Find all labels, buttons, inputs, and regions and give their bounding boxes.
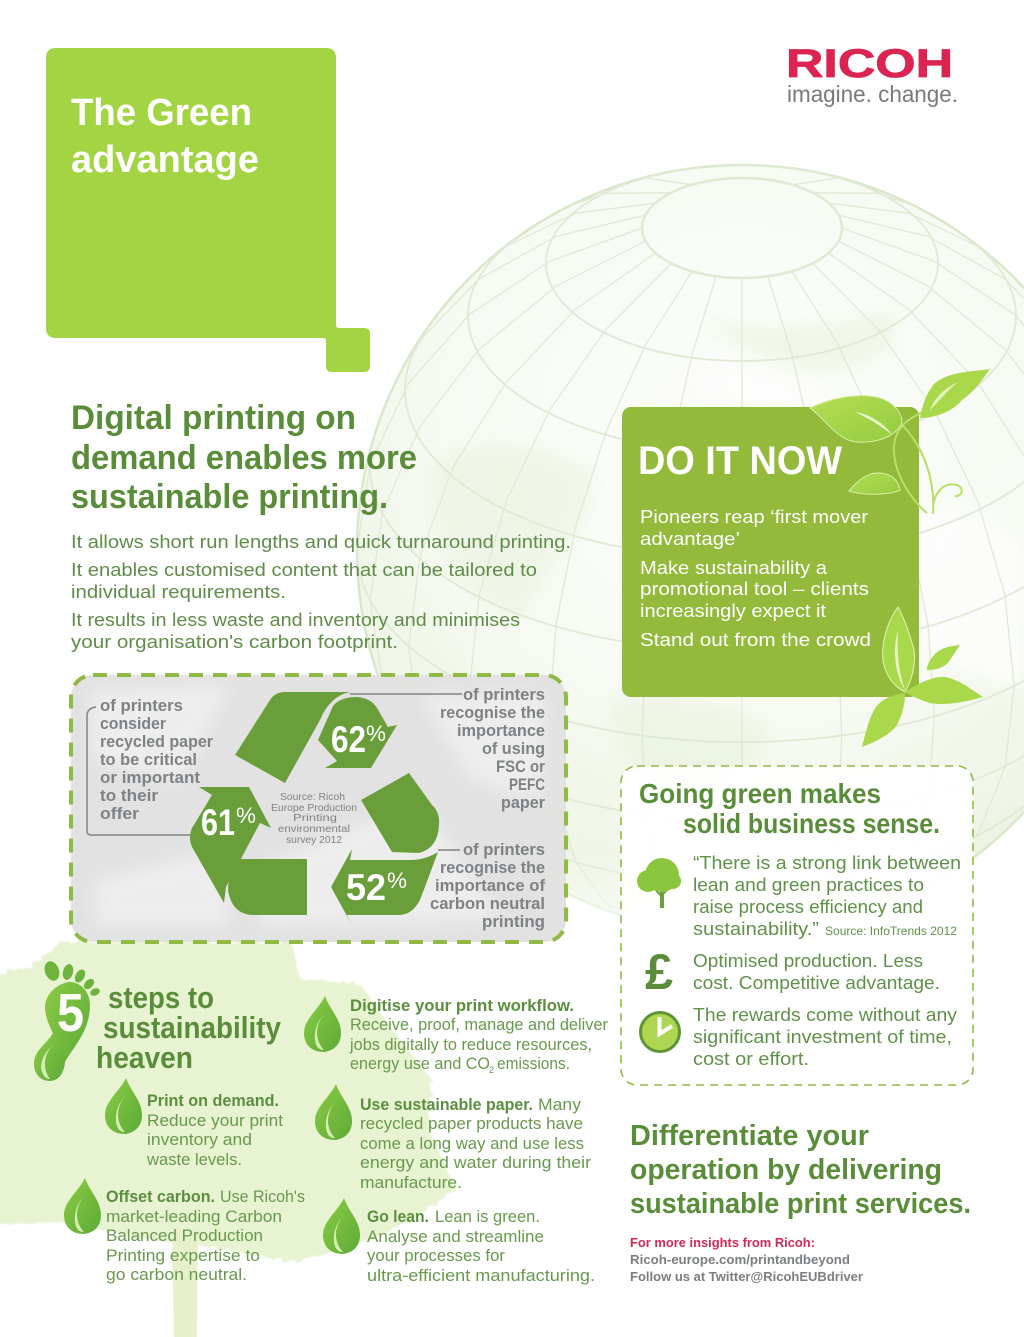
percentages: %	[236, 803, 256, 828]
heading: do it now: DO IT NOW	[638, 439, 842, 483]
stat text: 62 percent: recognise the	[440, 703, 545, 722]
intro text: your organisation's carbon footprint.	[71, 632, 398, 652]
percentages: %	[366, 721, 386, 746]
heading: differentiate: Differentiate your	[630, 1120, 869, 1152]
stat text: 52 percent: printing	[482, 912, 545, 931]
step: go lean: Go lean.	[367, 1208, 429, 1226]
stat text: 62 percent: PEFC	[509, 775, 545, 794]
intro text: It allows short run lengths and quick turnaround printing.	[71, 532, 571, 552]
footer links: For more insights from Ricoh:	[630, 1236, 815, 1250]
heading: going green: Going green makes	[639, 778, 881, 809]
quote text: “There is a strong link between	[693, 852, 961, 873]
step: digitise workflow	[304, 996, 608, 1075]
step: sustainable paper: manufacture.	[360, 1174, 462, 1192]
heading: differentiate: sustainable print services.	[630, 1188, 971, 1220]
icon: footprint with number five	[34, 959, 101, 1081]
quote text: raise process efficiency and	[693, 896, 923, 917]
cost text	[693, 950, 940, 993]
step: print on demand: inventory and	[147, 1131, 252, 1149]
leader lines	[87, 694, 462, 850]
step: print on demand: Print on demand.	[147, 1092, 279, 1110]
intro text: It results in less waste and inventory and minimises	[71, 610, 520, 630]
step: offset carbon: market-leading Carbon	[106, 1208, 282, 1226]
stat text: 61 percent: or important	[100, 768, 200, 787]
step: offset carbon: Use Ricoh's	[220, 1188, 305, 1206]
logo: Ricoh: imagine. change.	[787, 81, 958, 107]
stat text: 62 percent: importance	[457, 721, 545, 740]
stat text: 52 percent: importance of	[435, 876, 545, 895]
step: digitise workflow: 2	[489, 1065, 494, 1075]
heading: going green: solid business sense.	[683, 808, 940, 839]
logo: Ricoh: RICOH	[786, 42, 953, 86]
step: digitise workflow: jobs digitally to reduce resources,	[349, 1036, 592, 1054]
footer links	[630, 1236, 863, 1284]
heading: digital printing	[71, 399, 417, 516]
heading: digital printing: Digital printing on	[71, 399, 356, 437]
title: advantage	[71, 139, 259, 181]
step: sustainable paper: recycled paper products have	[360, 1115, 583, 1133]
stat text: 62 percent: of using	[482, 739, 545, 758]
percentages: 52	[346, 867, 386, 908]
stat text: 61 percent	[100, 696, 213, 823]
icon: pound: £	[645, 944, 673, 1000]
panel: do it now	[622, 369, 990, 747]
source note: survey 2012	[286, 834, 342, 846]
footer links: Ricoh-europe.com/printandbeyond	[630, 1253, 850, 1267]
icon: footprint with number five: 5	[57, 983, 84, 1043]
do it now text: promotional tool – clients	[640, 578, 869, 599]
intro text: individual requirements.	[71, 582, 286, 602]
percentages: 62	[331, 719, 366, 760]
stat text: 61 percent: of printers	[100, 696, 183, 715]
do it now text	[640, 506, 871, 650]
footer links: Follow us at Twitter@RicohEUBdriver	[630, 1270, 863, 1284]
rewards text: The rewards come without any	[693, 1004, 958, 1025]
step: sustainable paper: Many	[538, 1096, 582, 1114]
panel: recycling statistics	[71, 675, 566, 942]
stat text: 61 percent: recycled paper	[100, 732, 213, 751]
quote text: lean and green practices to	[693, 874, 924, 895]
rewards text: cost or effort.	[693, 1048, 809, 1069]
heading: 5 steps: steps to	[108, 980, 214, 1015]
stat text: 62 percent: paper	[501, 793, 545, 812]
cost text: Optimised production. Less	[693, 950, 923, 971]
step: offset carbon: Printing expertise to	[106, 1247, 260, 1265]
intro text: It enables customised content that can be tailored to	[71, 560, 537, 580]
percentages: 61	[201, 802, 235, 843]
do it now text: Pioneers reap ‘first mover	[640, 506, 868, 527]
step: sustainable paper	[315, 1084, 592, 1192]
do it now text: advantage’	[640, 528, 740, 549]
stat text: 62 percent	[440, 685, 545, 812]
stat text: 61 percent: offer	[100, 804, 139, 823]
heading: going green	[639, 778, 940, 839]
icon: lower leaves	[862, 607, 983, 747]
stat text: 62 percent: of printers	[463, 685, 545, 704]
stat text: 52 percent: carbon neutral	[430, 894, 545, 913]
step: sustainable paper: come a long way and use less	[360, 1135, 584, 1153]
quote text: Source: InfoTrends 2012	[825, 924, 957, 938]
heading: digital printing: demand enables more	[71, 439, 417, 477]
stat text: 52 percent: of printers	[463, 840, 545, 859]
stat text: 61 percent: to be critical	[100, 750, 197, 769]
step: go lean: your processes for	[367, 1247, 506, 1265]
step: print on demand: Reduce your print	[147, 1112, 283, 1130]
rewards text: significant investment of time,	[693, 1026, 952, 1047]
heading: 5 steps: sustainability	[103, 1010, 282, 1045]
step: sustainable paper: Use sustainable paper.	[360, 1096, 533, 1114]
do it now text: increasingly expect it	[640, 600, 826, 621]
intro text	[71, 532, 571, 652]
stat text: 52 percent	[430, 840, 545, 931]
quote text	[693, 852, 961, 939]
panel: going green	[621, 766, 973, 1085]
cost text: cost. Competitive advantage.	[693, 972, 940, 993]
source note: Printing	[293, 812, 337, 824]
icon: tree	[637, 858, 681, 908]
logo: Ricoh	[786, 42, 958, 107]
source note: Europe Production	[271, 802, 357, 814]
step: go lean	[323, 1198, 595, 1285]
step: go lean: Lean is green.	[435, 1208, 540, 1226]
source note: environmental	[278, 823, 350, 835]
title panel	[46, 48, 370, 372]
step: digitise workflow: emissions.	[497, 1055, 570, 1073]
stat text: 52 percent: recognise the	[440, 858, 545, 877]
step: offset carbon: go carbon neutral.	[106, 1266, 247, 1284]
stat text: 61 percent: to their	[100, 786, 158, 805]
step: print on demand	[105, 1078, 283, 1169]
step: offset carbon	[64, 1178, 305, 1284]
globe background	[340, 165, 1024, 960]
rewards text	[693, 1004, 958, 1069]
source note	[271, 791, 357, 846]
heading: differentiate	[630, 1120, 971, 1220]
step: go lean: ultra-efficient manufacturing.	[367, 1267, 595, 1285]
title: The Green	[71, 92, 252, 134]
stat text: 62 percent: FSC or	[496, 757, 545, 776]
step: digitise workflow: energy use and CO	[350, 1055, 490, 1073]
recycling symbol	[190, 692, 439, 925]
heading: digital printing: sustainable printing.	[71, 478, 388, 516]
title	[71, 92, 259, 181]
stat text: 61 percent: consider	[100, 714, 166, 733]
icon: clock	[640, 1012, 680, 1052]
step: print on demand: waste levels.	[146, 1151, 242, 1169]
heading: 5 steps: heaven	[96, 1040, 193, 1075]
percentages	[201, 719, 407, 908]
step: digitise workflow: Receive, proof, manage and deliver	[350, 1016, 608, 1034]
do it now text: Make sustainability a	[640, 557, 828, 578]
percentages: %	[387, 868, 407, 893]
source note: Source: Ricoh	[280, 791, 345, 803]
quote text: sustainability.”	[693, 918, 819, 939]
step: go lean: Analyse and streamline	[367, 1228, 544, 1246]
step: offset carbon: Offset carbon.	[106, 1188, 215, 1206]
icon: upper leaves	[810, 369, 990, 514]
do it now text: Stand out from the crowd	[640, 629, 871, 650]
step: offset carbon: Balanced Production	[106, 1227, 263, 1245]
step: digitise workflow: Digitise your print workflow.	[350, 997, 574, 1015]
heading: 5 steps	[96, 980, 282, 1075]
tree background	[0, 942, 456, 1337]
step: sustainable paper: energy and water during their	[360, 1154, 592, 1172]
heading: differentiate: operation by delivering	[630, 1154, 942, 1186]
